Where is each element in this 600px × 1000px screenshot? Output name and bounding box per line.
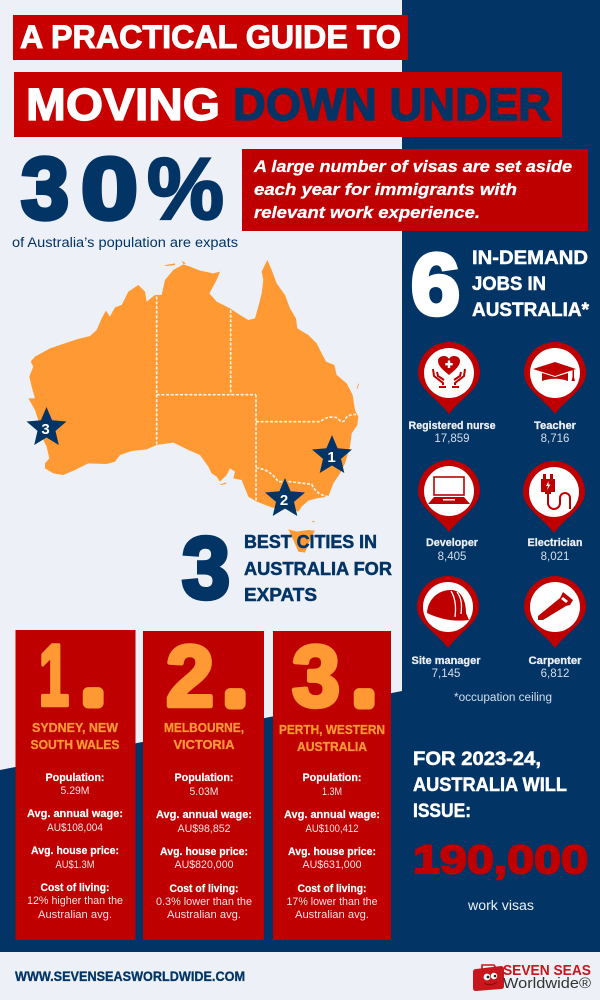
city card 2: Melbourne: MELBOURNE, <box>164 720 244 735</box>
job: developer: 8,405 <box>438 551 466 563</box>
city card 1: Sydney: Population: <box>46 772 104 784</box>
city card 3: Perth: Avg. house price: <box>288 846 376 858</box>
star marker 1: Sydney: 1 <box>327 449 336 466</box>
statistic: 30 percent expats: 0 <box>81 140 138 238</box>
footer website: WWW.SEVENSEASWORLDWIDE.COM <box>15 969 245 984</box>
statistic: 30 percent expats: of Australia’s population are expats <box>12 235 238 250</box>
pin icon: hard hat <box>417 576 479 648</box>
city card 2: Melbourne: AU$98,852 <box>178 823 230 835</box>
callout: visas set aside: each year for immigrants with <box>254 181 517 199</box>
job: registered nurse <box>408 342 496 445</box>
job: site manager: 7,145 <box>432 668 460 680</box>
pin icon: graduation cap <box>524 342 586 414</box>
statistic: 30 percent expats <box>12 140 238 250</box>
city card 2: Melbourne: . <box>226 641 245 719</box>
heading: 3 best cities: 3 <box>182 520 230 617</box>
job: teacher: 8,716 <box>541 433 569 445</box>
city card 1: Sydney: SYDNEY, NEW <box>32 720 119 735</box>
callout: visas set aside: relevant work experience. <box>254 204 480 222</box>
city card 3: Perth: AU$631,000 <box>302 859 362 871</box>
city card 2: Melbourne <box>143 629 264 940</box>
heading: 6 in-demand jobs: IN-DEMAND <box>472 248 588 269</box>
heading: 3 best cities: AUSTRALIA FOR <box>244 559 392 579</box>
pin icon: laptop <box>418 460 480 532</box>
city card 3: Perth: Cost of living: <box>298 883 366 895</box>
job: site manager: Site manager <box>412 655 481 667</box>
statistic: 190,000 work visas: work visas <box>467 898 534 913</box>
city card 3: Perth: PERTH, WESTERN <box>279 722 385 737</box>
job: carpenter <box>524 576 586 680</box>
city card 2: Melbourne: AU$820,000 <box>174 859 234 871</box>
heading: 6 in-demand jobs: AUSTRALIA* <box>472 300 590 321</box>
title line 2 <box>14 72 562 137</box>
star marker 3: Perth <box>26 407 66 445</box>
city card 1: Sydney: AU$1.3M <box>56 859 94 871</box>
job: registered nurse: 17,859 <box>434 433 470 445</box>
job: teacher <box>524 342 586 445</box>
statistic: 190,000 work visas: ISSUE: <box>413 801 471 822</box>
city card 3: Perth: 3 <box>292 629 340 725</box>
logo: Seven Seas Worldwide: SEVEN SEAS <box>503 962 591 979</box>
heading: 3 best cities: EXPATS <box>244 585 317 605</box>
pin icon: hand saw <box>524 576 586 648</box>
logo: Seven Seas Worldwide <box>473 962 591 992</box>
city card 3: Perth: Population: <box>302 772 362 784</box>
heading: 6 in-demand jobs <box>411 237 590 333</box>
pin icon: heart in hands <box>418 342 480 414</box>
city card 3: Perth <box>273 629 391 940</box>
title line 2: DOWN UNDER <box>233 79 551 130</box>
city card 2: Melbourne: VICTORIA <box>174 737 235 752</box>
city card 1: Sydney: Cost of living: <box>40 882 110 894</box>
title line 1: A PRACTICAL GUIDE TO <box>20 19 401 55</box>
footnote: occupation ceiling: *occupation ceiling <box>454 692 552 704</box>
statistic: 190,000 work visas: FOR 2023-24, <box>413 749 541 770</box>
city card 2: Melbourne: 0.3% lower than the <box>156 896 252 908</box>
city card 3: Perth: . <box>354 641 374 719</box>
statistic: 30 percent expats: % <box>147 141 224 238</box>
statistic: 30 percent expats: 3 <box>21 140 69 238</box>
statistic: 190,000 work visas: AUSTRALIA WILL <box>413 775 567 796</box>
star marker 2: Melbourne: 2 <box>280 492 288 509</box>
city card 2: Melbourne: Avg. annual wage: <box>156 809 252 821</box>
city card 2: Melbourne: 2 <box>166 629 214 725</box>
logo: Seven Seas Worldwide: Worldwide® <box>503 975 591 992</box>
job: carpenter: 6,812 <box>541 668 569 680</box>
city card 1: Sydney: 12% higher than the <box>27 895 123 907</box>
job: electrician: Electrician <box>528 537 583 549</box>
city card 2: Melbourne: Cost of living: <box>170 883 238 895</box>
heading: 6 in-demand jobs: 6 <box>411 237 460 333</box>
job: site manager <box>412 576 481 680</box>
city card 1: Sydney: 1 <box>39 628 69 724</box>
city card 2: Melbourne: Population: <box>174 772 234 784</box>
title line 2: MOVING <box>26 79 220 130</box>
heading: 3 best cities <box>182 520 392 617</box>
city card 1: Sydney: Australian avg. <box>38 909 112 921</box>
city card 1: Sydney: 5.29M <box>60 785 90 797</box>
star marker 1: Sydney <box>312 435 352 473</box>
job: developer: Developer <box>426 537 479 549</box>
star marker 3: Perth: 3 <box>41 421 50 438</box>
city card 3: Perth: Australian avg. <box>295 909 369 921</box>
job: electrician: 8,021 <box>541 551 569 563</box>
pin icon: electric plug <box>523 461 585 533</box>
job: registered nurse: Registered nurse <box>408 420 496 432</box>
job: teacher: Teacher <box>534 420 577 432</box>
star marker 2: Melbourne <box>265 478 305 516</box>
job: electrician <box>523 461 585 563</box>
city card 1: Sydney: Avg. house price: <box>31 845 119 857</box>
city card 1: Sydney: AU$108,004 <box>47 822 103 834</box>
job: developer <box>418 460 480 563</box>
city card 3: Perth: 1.3M <box>322 786 342 798</box>
city card 3: Perth: AU$100,412 <box>306 823 358 835</box>
city card 1: Sydney: SOUTH WALES <box>30 737 120 752</box>
heading: 3 best cities: BEST CITIES IN <box>244 532 377 552</box>
callout: visas set aside: A large number of visas are set aside <box>253 158 572 176</box>
city card 2: Melbourne: 5.03M <box>190 786 218 798</box>
city card 1: Sydney: Avg. annual wage: <box>27 808 123 820</box>
map of Australia <box>28 260 359 553</box>
city card 3: Perth: Avg. annual wage: <box>284 809 380 821</box>
city card 1: Sydney: . <box>84 640 103 718</box>
job: carpenter: Carpenter <box>528 655 582 667</box>
city card 2: Melbourne: Australian avg. <box>167 909 241 921</box>
city card 3: Perth: 17% lower than the <box>286 896 378 908</box>
statistic: 190,000 work visas <box>413 749 588 913</box>
city card 3: Perth: AUSTRALIA <box>297 739 368 754</box>
heading: 6 in-demand jobs: JOBS IN <box>472 274 546 295</box>
city card 1: Sydney <box>16 628 136 940</box>
statistic: 190,000 work visas: 190,000 <box>413 838 588 882</box>
callout: visas set aside <box>242 149 588 231</box>
city card 2: Melbourne: Avg. house price: <box>160 846 248 858</box>
